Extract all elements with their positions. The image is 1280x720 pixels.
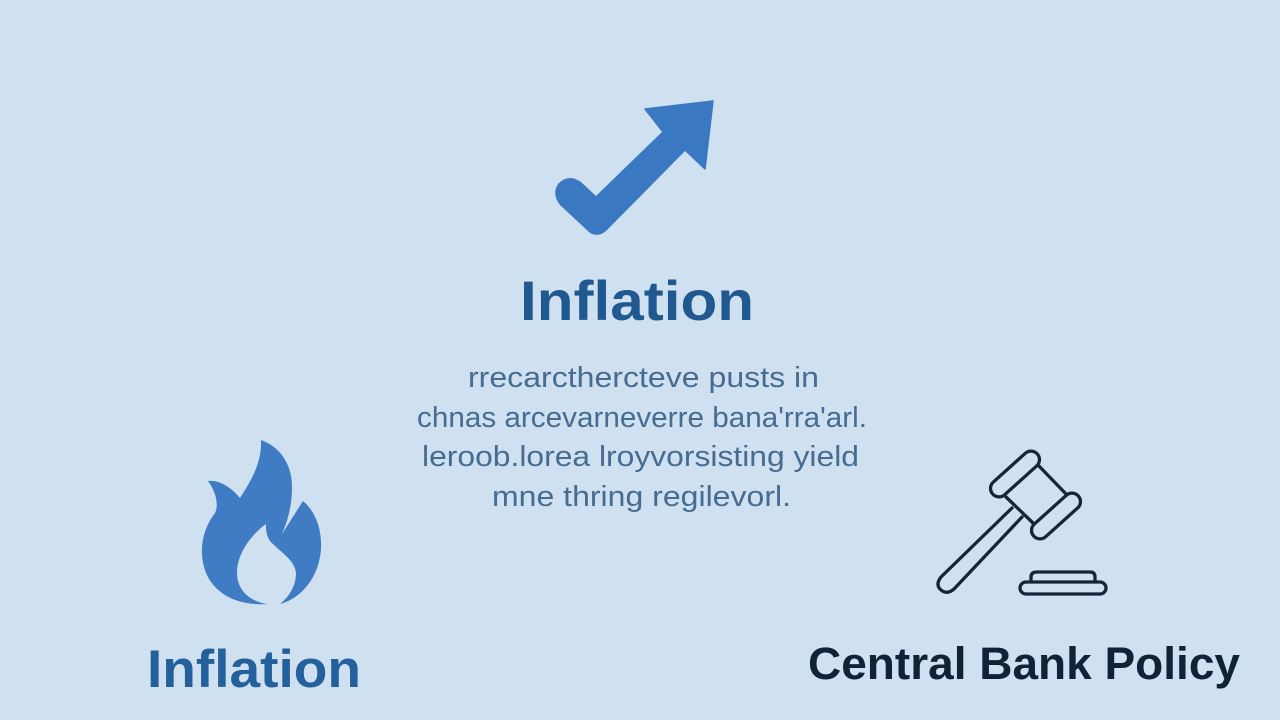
text block: center description: mne thring regilevorl. <box>492 481 791 513</box>
text block: center description: chnas arcevarneverre bana'rra'arl. <box>417 402 867 434</box>
label: flame Inflation: Inflation <box>147 640 361 699</box>
icon: flame <box>202 440 321 604</box>
text block: center description: rrecarcthercteve pusts in <box>468 362 819 394</box>
gavel head top bar <box>987 448 1043 500</box>
gavel head bottom bar <box>1028 490 1084 542</box>
text block: center description <box>417 362 867 513</box>
gavel handle <box>938 508 1022 592</box>
gavel base lower <box>1020 582 1106 594</box>
text block: center description: leroob.lorea lroyvorsisting yield <box>422 441 859 473</box>
gavel base upper <box>1031 572 1095 582</box>
gavel head body <box>1006 465 1067 523</box>
heading: center Inflation: Inflation <box>520 269 754 332</box>
icon: gavel <box>938 448 1106 594</box>
icon: rising arrow <box>556 101 713 234</box>
label: Central Bank Policy: Central Bank Policy <box>808 638 1240 689</box>
